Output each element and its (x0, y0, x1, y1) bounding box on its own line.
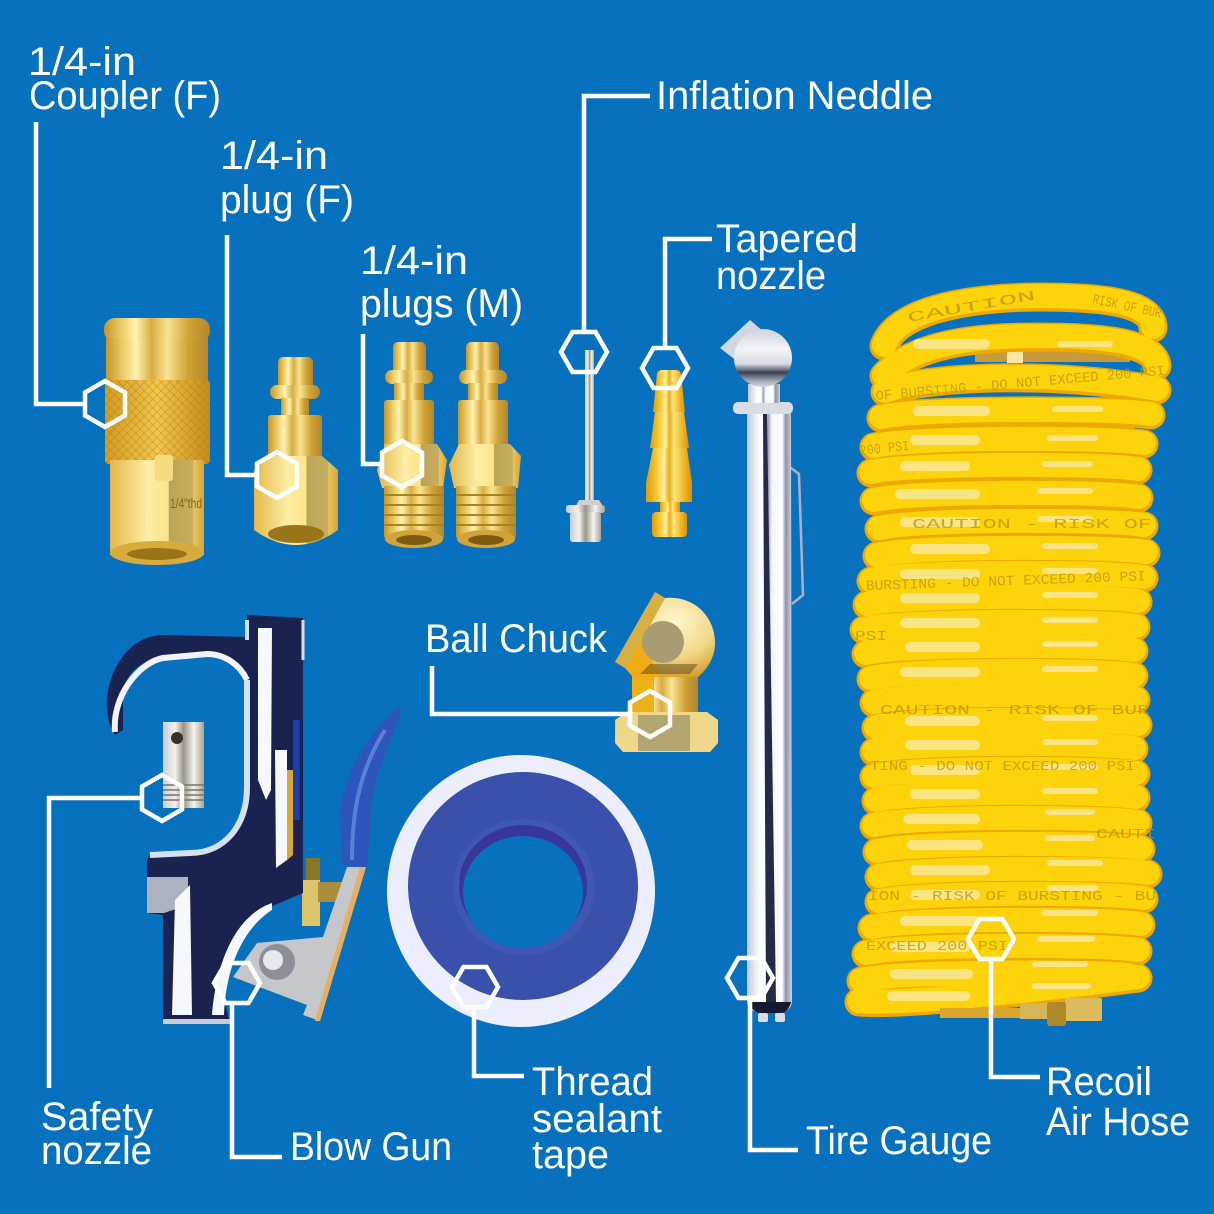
item: ball chuck (615, 592, 718, 752)
hose printed text (855, 289, 1165, 955)
marker: safety nozzle (49, 775, 182, 1088)
item: thread sealant tape (387, 755, 655, 1027)
item: tapered nozzle (646, 370, 692, 537)
label: Thread sealant tape: sealant (532, 1097, 662, 1141)
marker: plug F (227, 235, 297, 498)
marker: recoil hose (968, 919, 1040, 1077)
label: Safety nozzle: nozzle (41, 1129, 152, 1173)
hose printed text: CAUTION (906, 289, 1037, 327)
item: inflation needle (566, 350, 605, 542)
item: safety nozzle (163, 722, 204, 808)
hose printed text: BURSTING - DO NOT EXCEED 200 PSI (866, 569, 1146, 595)
label: 1/4-in plug (F) (220, 134, 354, 222)
label: 1/4-in Coupler (F): 1/4-in (28, 40, 136, 84)
label: Tapered nozzle (716, 217, 858, 298)
label: Thread sealant tape: tape (532, 1133, 609, 1177)
hose printed text: CAUTION - RISK OF (912, 517, 1152, 533)
marker: tapered nozzle (642, 239, 712, 388)
hose printed text: 200 PSI (859, 439, 910, 460)
item: coupler (104, 318, 210, 565)
item: coupler: 1/4"thd (170, 495, 202, 511)
label: Thread sealant tape (532, 1060, 662, 1177)
hose printed text: CAUTION - RISK OF BUR (880, 703, 1151, 719)
marker: tire gauge (727, 958, 798, 1150)
label: Recoil Air Hose: Air Hose (1046, 1100, 1190, 1144)
label: 1/4-in Coupler (F) (28, 40, 221, 118)
label: Thread sealant tape: Thread (532, 1060, 653, 1104)
label: 1/4-in plugs (M) (360, 239, 523, 326)
label: Recoil Air Hose: Recoil (1046, 1060, 1152, 1104)
hose printed text: TING - DO NOT EXCEED 200 PSI (870, 759, 1135, 775)
item: plugs M (377, 342, 521, 548)
blue lever grip (340, 708, 400, 868)
brass nut (302, 858, 344, 926)
hose printed text: CAUTI (1096, 827, 1156, 843)
hose coil (859, 296, 1157, 1003)
item: plug F (254, 357, 338, 545)
hose end fitting top (975, 347, 1130, 363)
plug M left (377, 342, 447, 548)
gun highlights (115, 620, 303, 1024)
marker: inflation needle (561, 96, 650, 372)
marker: blow gun (214, 963, 282, 1157)
hose printed text: EXCEED 200 PSI (866, 939, 1008, 955)
marker: plugs M (363, 334, 422, 487)
item: recoil air hose (855, 289, 1165, 1026)
label: 1/4-in plug (F): 1/4-in (220, 134, 328, 178)
hose printed text: OF BURSTING - DO NOT EXCEED 200 PSI (875, 364, 1165, 405)
hose printed text: PSI (855, 629, 887, 645)
label: Ball Chuck: Ball Chuck (425, 617, 608, 661)
callout leaders and hexagon markers (36, 96, 1040, 1157)
silver lever (233, 867, 366, 1021)
item: tire gauge (720, 320, 803, 1022)
gun body (107, 615, 303, 1023)
plug M right (449, 342, 521, 548)
label: Safety nozzle: Safety (41, 1095, 153, 1139)
label: Safety nozzle (41, 1095, 153, 1173)
label: Blow Gun: Blow Gun (290, 1125, 452, 1169)
label: Tire Gauge: Tire Gauge (806, 1119, 992, 1163)
item: blow gun (107, 615, 401, 1024)
label: 1/4-in Coupler (F): Coupler (F) (29, 74, 221, 118)
label: Inflation Neddle: Inflation Neddle (656, 74, 933, 118)
marker: ball chuck (432, 666, 670, 737)
hose printed text: ION - RISK OF BURSTING - BU (868, 889, 1156, 905)
hose end fitting bottom (940, 998, 1102, 1026)
hose printed text: RISK OF BUR (1091, 292, 1163, 323)
label: Tapered nozzle: nozzle (716, 254, 826, 298)
label: Recoil Air Hose (1046, 1060, 1190, 1144)
label: 1/4-in plug (F): plug (F) (220, 178, 354, 222)
marker: coupler (36, 122, 125, 427)
label: 1/4-in plugs (M): 1/4-in (360, 239, 468, 283)
marker: sealant tape (452, 967, 524, 1076)
label: Tapered nozzle: Tapered (716, 217, 858, 261)
label: 1/4-in plugs (M): plugs (M) (360, 282, 523, 326)
